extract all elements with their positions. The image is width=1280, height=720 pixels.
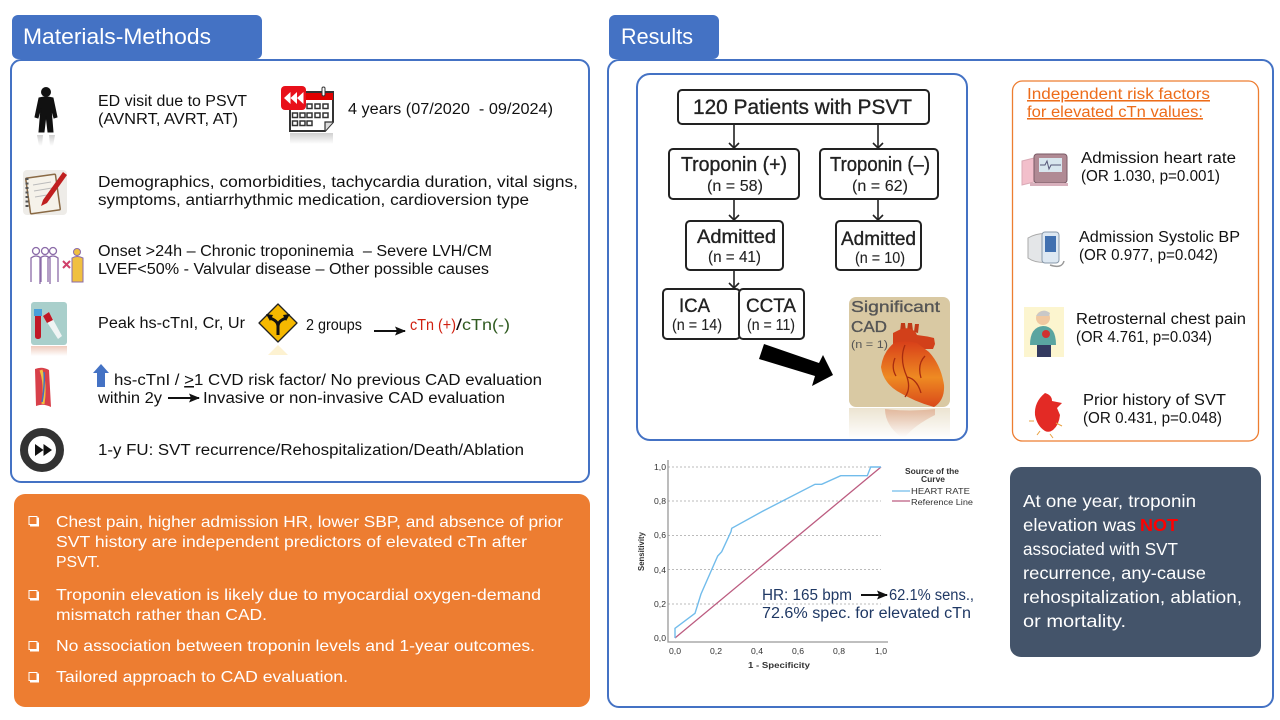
- bullet: oxygen-demand mismatch: mismatch rather than CAD.: [56, 607, 267, 624]
- box: CCTA: [739, 289, 804, 339]
- icon: calendar with rewind: [281, 86, 333, 144]
- icon: road fork sign: [259, 304, 297, 355]
- bullet: tailored approach: Tailored approach to CAD evaluation.: [56, 669, 348, 686]
- panel: results: [608, 60, 1273, 707]
- risk factor: chest pain: (OR 4.761, p=0.034): [1076, 329, 1212, 346]
- icon: fast forward: [24, 432, 60, 468]
- callout: one-year outcomes: associated with SVT: [1023, 539, 1178, 559]
- callout: one-year outcomes: or mortality.: [1023, 611, 1126, 631]
- text: CAD evaluation criteria: within 2y: [97, 390, 162, 407]
- box: troponin positive: (n = 58): [707, 178, 763, 195]
- legend: Source of the: [905, 466, 959, 476]
- risk factor: chest pain: [1076, 311, 1246, 346]
- x axis tick labels: 0,6: [792, 646, 804, 656]
- box: admitted right: (n = 10): [855, 250, 905, 267]
- text: two groups: cTn(-): [462, 317, 510, 334]
- risk factor: systolic BP: (OR 0.977, p=0.042): [1079, 247, 1218, 264]
- x axis tick labels: [669, 646, 887, 656]
- box: admitted left: Admitted: [697, 227, 776, 248]
- box: troponin negative: [820, 149, 938, 199]
- axis title: 1 - specificity: 1 - Specificity: [748, 660, 810, 670]
- box: CCTA: (n = 11): [747, 317, 795, 334]
- text: follow-up: 1-y FU: SVT recurrence/Rehospitalization/Death/Ablation: [98, 442, 524, 459]
- icon: person with chest pain: [1024, 307, 1064, 357]
- icon: ECG monitor: [1022, 154, 1068, 186]
- icon: blood tube and syringe: [31, 302, 67, 356]
- y axis tick labels: 0,2: [654, 599, 666, 609]
- text: exclusion criteria: Onset >24h – Chronic troponinemia – Severe LVH/CM: [98, 243, 492, 260]
- axis title: sensitivity: Sensitivity: [636, 532, 646, 571]
- risk factor: prior SVT: (OR 0.431, p=0.048): [1083, 410, 1222, 427]
- icon: artery: [35, 368, 51, 407]
- icon: notebook and pencil: [23, 170, 67, 215]
- box: troponin positive: [669, 149, 799, 199]
- bullet: oxygen-demand mismatch: Troponin elevation is likely due to myocardial oxygen-demand: [56, 587, 541, 604]
- header: Results: [609, 15, 719, 59]
- callout: one-year outcomes: recurrence, any-cause: [1023, 563, 1206, 583]
- y axis tick labels: 0,6: [654, 530, 666, 540]
- box: ICA: ICA: [679, 296, 710, 317]
- box: troponin negative: Troponin (–): [830, 154, 930, 176]
- box: CCTA: CCTA: [746, 296, 796, 317]
- callout: one-year outcomes: NOT: [1140, 515, 1178, 535]
- text: two groups: [306, 317, 510, 334]
- icon: up arrow: [93, 364, 109, 387]
- text: CAD evaluation criteria: Invasive or non-invasive CAD evaluation: [203, 390, 505, 407]
- box: troponin negative: (n = 62): [852, 178, 908, 195]
- panel: materials and methods: [11, 60, 589, 482]
- tile: significant CAD with heart: [849, 297, 950, 439]
- box: admitted right: [836, 221, 921, 270]
- text: labs: Peak hs-cTnI, Cr, Ur: [98, 315, 245, 332]
- icon: excluded patients: [31, 248, 83, 284]
- y axis tick labels: 0,8: [654, 496, 666, 506]
- heading: risk factors: [1027, 86, 1210, 121]
- box: troponin positive: Troponin (+): [681, 154, 787, 176]
- text: study period: 4 years (07/2020 - 09/2024): [348, 101, 553, 118]
- callout: one-year outcomes: rehospitalization, ablation,: [1023, 587, 1242, 607]
- box: ICA: [663, 289, 740, 339]
- panel: conclusions: [14, 494, 590, 707]
- text: ED visit: ED visit due to PSVT: [98, 93, 248, 110]
- box: ICA: (n = 14): [672, 317, 722, 334]
- annotation: HR cutoff: 62.1% sens.,: [889, 587, 974, 604]
- text: CAD evaluation criteria: hs-cTnI / >1 CVD risk factor/ No previous CAD evaluation: [114, 372, 542, 389]
- header: Results: Results: [621, 24, 693, 49]
- callout: one-year outcomes: [1010, 467, 1261, 657]
- bullet: chest pain predictors: [29, 514, 564, 571]
- panel: patient flowchart: [637, 74, 967, 440]
- icon: red heart: [1029, 393, 1062, 438]
- box: 120 patients: 120 Patients with PSVT: [693, 96, 912, 119]
- header: Materials-Methods: [12, 15, 262, 59]
- tile: significant CAD with heart: (n = 1): [851, 339, 888, 351]
- heading: risk factors: for elevated cTn values:: [1027, 104, 1203, 121]
- bullet: oxygen-demand mismatch: [29, 587, 541, 624]
- box: admitted left: [686, 221, 783, 270]
- icon: heart: [881, 323, 944, 407]
- bullet: chest pain predictors: SVT history are independent predictors of elevated cTn after: [56, 534, 528, 551]
- bullet: no association: No association between troponin levels and 1-year outcomes.: [56, 638, 535, 655]
- x axis tick labels: 0,4: [751, 646, 763, 656]
- heading: risk factors: Independent risk factors: [1027, 86, 1210, 103]
- x axis tick labels: 1,0: [875, 646, 887, 656]
- text: CAD evaluation criteria: [97, 372, 542, 407]
- chart: ROC curve: [636, 460, 974, 670]
- text: demographics: symptoms, antiarrhythmic medication, cardioversion type: [98, 192, 529, 209]
- icon: person: [35, 87, 57, 146]
- risk factor: prior SVT: Prior history of SVT: [1083, 392, 1227, 409]
- risk factor: systolic BP: Admission Systolic BP: [1079, 229, 1240, 246]
- text: exclusion criteria: [98, 243, 492, 278]
- text: demographics: [98, 174, 578, 209]
- text: two groups: 2 groups: [306, 317, 362, 334]
- legend: Curve: [921, 474, 945, 484]
- risk factor: systolic BP: [1079, 229, 1240, 264]
- y axis tick labels: 1,0: [654, 462, 666, 472]
- box: 120 patients: [678, 90, 929, 124]
- box: admitted left: (n = 41): [708, 249, 761, 266]
- panel: independent risk factors: [1012, 81, 1258, 441]
- annotation: HR cutoff: [762, 587, 974, 622]
- legend: Reference Line: [911, 497, 973, 507]
- x axis tick labels: 0,8: [833, 646, 845, 656]
- text: demographics: Demographics, comorbidities, tachycardia duration, vital signs,: [98, 174, 578, 191]
- annotation: HR cutoff: 72.6% spec. for elevated cTn: [762, 605, 971, 622]
- tile: significant CAD with heart: CAD: [851, 319, 887, 336]
- flow arrows: [734, 124, 878, 288]
- series: reference line: [675, 467, 881, 638]
- risk factor: heart rate: (OR 1.030, p=0.001): [1081, 168, 1220, 185]
- text: exclusion criteria: LVEF<50% - Valvular disease – Other possible causes: [98, 261, 489, 278]
- y axis tick labels: 0,0: [654, 633, 666, 643]
- legend: HEART RATE: [911, 486, 970, 496]
- header: Materials-Methods: Materials-Methods: [23, 24, 211, 49]
- risk factor: prior SVT: [1083, 392, 1227, 427]
- x axis tick labels: 0,0: [669, 646, 681, 656]
- text: ED visit: [98, 93, 248, 128]
- y axis tick labels: [654, 462, 666, 643]
- arrow: to significant CAD: [759, 344, 833, 386]
- box: admitted right: Admitted: [841, 229, 916, 250]
- bullet: chest pain predictors: Chest pain, higher admission HR, lower SBP, and absence of prior: [56, 514, 564, 531]
- callout: one-year outcomes: At one year, troponin: [1023, 491, 1196, 511]
- risk factor: heart rate: Admission heart rate: [1081, 150, 1236, 167]
- text: two groups: /: [456, 317, 463, 334]
- legend: [892, 466, 973, 507]
- x axis tick labels: 0,2: [710, 646, 722, 656]
- tile: significant CAD with heart: Significant: [851, 299, 941, 316]
- icon: blood pressure cuff: [1028, 232, 1064, 266]
- text: ED visit: (AVNRT, AVRT, AT): [98, 111, 238, 128]
- bullet: chest pain predictors: PSVT.: [56, 554, 100, 571]
- risk factor: heart rate: [1081, 150, 1236, 185]
- y axis tick labels: 0,4: [654, 565, 666, 575]
- annotation: HR cutoff: HR: 165 bpm: [762, 587, 852, 604]
- callout: one-year outcomes: elevation was: [1023, 515, 1136, 535]
- text: two groups: cTn (+): [410, 317, 456, 334]
- risk factor: chest pain: Retrosternal chest pain: [1076, 311, 1246, 328]
- series: heart rate curve: [675, 467, 881, 638]
